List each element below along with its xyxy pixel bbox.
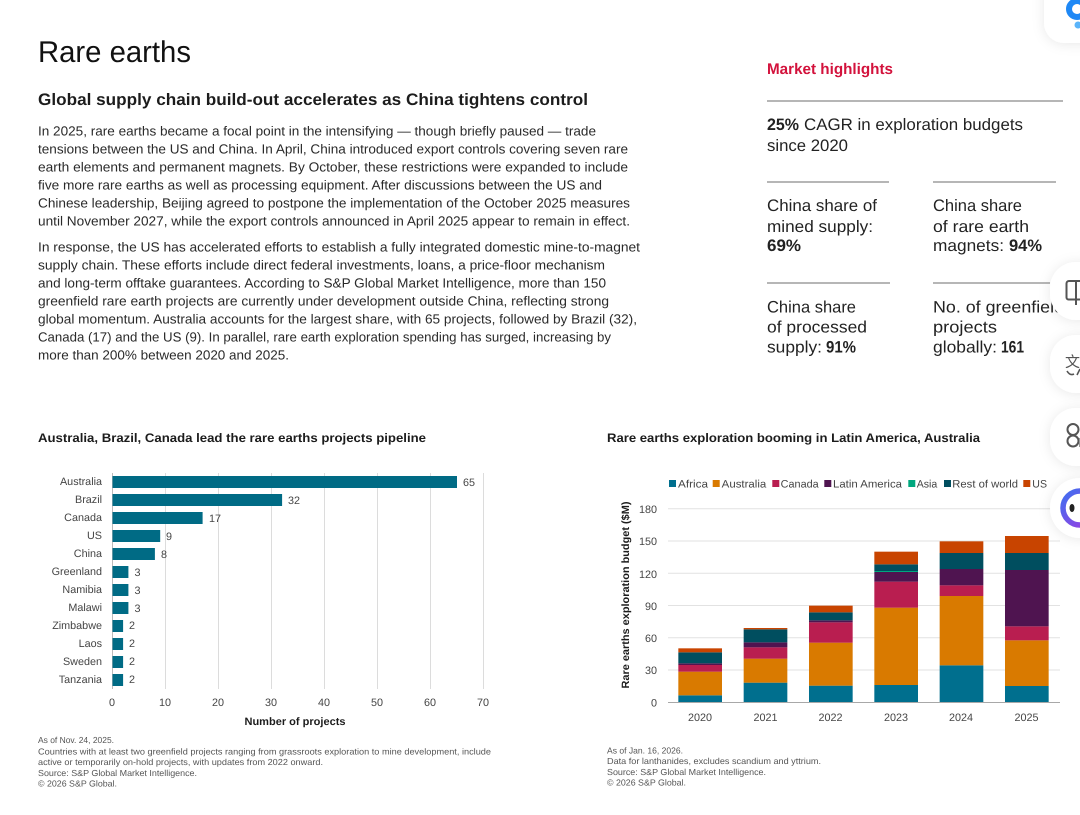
footnote: right chart: Source: S&P Global Market Intelligence. [607, 767, 766, 777]
chart title: projects pipeline: Australia, Brazil, Canada lead the rare earths projects pipeline [38, 431, 426, 445]
stacked bar chart: exploration budgets: 2020 [688, 712, 712, 724]
stat: mined supply: mined supply: [767, 217, 873, 236]
bar chart: projects by country: 3 [134, 567, 141, 579]
text block: response paragraph: global momentum. Australia accounts for the largest share, with 65 projects, followed by Brazil (32), [38, 312, 637, 326]
stat: CAGR: 25% [767, 115, 799, 134]
bar chart: projects by country: Zimbabwe [52, 620, 102, 632]
stacked bar chart: exploration budgets: 2021 [753, 712, 778, 724]
stat: greenfield projects [933, 298, 1064, 356]
bar chart: projects by country: Malawi [68, 602, 102, 614]
text block: response paragraph: Canada (17) and the US (9). In parallel, rare earth exploration spending has surged, increasing by [38, 330, 611, 344]
floating button: translate [1050, 335, 1080, 393]
text block: response paragraph: In response, the US has accelerated efforts to establish a fully integrated domestic mine-to-magnet [38, 240, 640, 254]
stat: processed supply: 91% [826, 338, 856, 356]
footnote: left chart: As of Nov. 24, 2025. [38, 735, 114, 745]
stacked bar chart: exploration budgets: 180 [639, 504, 657, 516]
footnote: left chart: Countries with at least two greenfield projects ranging from grassroots exploration to mine development, include [38, 746, 491, 756]
axis title: exploration budget: Rare earths exploration budget ($M) [620, 502, 632, 688]
stat: greenfield projects: No. of greenfield [933, 298, 1064, 316]
stat: greenfield projects: 161 [1001, 338, 1024, 356]
footnote: left chart [38, 735, 491, 788]
stacked bar chart: exploration budgets: 150 [639, 536, 657, 548]
stacked bar chart: exploration budgets: 2024 [949, 712, 973, 724]
bar chart: projects by country: 20 [212, 697, 224, 709]
footnote: right chart: © 2026 S&P Global. [607, 778, 686, 788]
stat: rare earth magnets: magnets: [933, 236, 1004, 255]
bar chart: projects by country: Canada [64, 512, 102, 524]
bar chart: projects by country: 2 [129, 620, 135, 632]
bar chart: projects by country: Brazil [75, 494, 102, 506]
stacked bar chart: exploration budgets [620, 502, 1060, 724]
bar chart: projects by country: 17 [209, 513, 221, 525]
stacked bar chart: exploration budgets: 60 [645, 633, 657, 645]
bar chart: projects by country: Tanzania [59, 674, 102, 686]
stacked bar chart: exploration budgets: 120 [639, 569, 657, 581]
floating button: apps [1050, 408, 1080, 466]
stat: mined supply: 69% [767, 236, 801, 255]
floating button: translate: 文 [1065, 351, 1080, 372]
bar chart: projects by country: Laos [79, 638, 103, 650]
legend: regions: Africa [678, 478, 708, 490]
bar chart: projects by country: 70 [477, 697, 489, 709]
bar chart: projects by country: 2 [129, 638, 135, 650]
text block: intro paragraph: In 2025, rare earths became a focal point in the intensifying — though briefly paused — trade [38, 124, 596, 138]
stacked bar chart: exploration budgets: 90 [645, 601, 657, 613]
title: Rare earths [38, 36, 191, 69]
bar chart: projects by country: 40 [318, 697, 330, 709]
bar chart: projects by country: 9 [166, 531, 172, 543]
text block: intro paragraph: until November 2027, while the export controls announced in April 2025 appear to remain in effect. [38, 214, 630, 228]
footnote: left chart: Source: S&P Global Market Intelligence. [38, 768, 197, 778]
stacked bar chart: exploration budgets: 2023 [884, 712, 908, 724]
axis title: number of projects: Number of projects [244, 716, 346, 728]
legend: regions [669, 478, 1047, 490]
bar chart: projects by country: 0 [109, 697, 115, 709]
stat: CAGR: since 2020 [767, 136, 848, 155]
footnote: right chart [607, 746, 821, 788]
bar chart: projects by country: 60 [424, 697, 436, 709]
bar chart: projects by country: Australia [60, 476, 102, 488]
legend: regions: Asia [917, 478, 937, 490]
bar chart: projects by country: 3 [134, 603, 141, 615]
footnote: left chart: © 2026 S&P Global. [38, 778, 117, 788]
subheading: Global supply chain build-out accelerates as China tightens control [38, 90, 588, 109]
bar chart: projects by country: 30 [265, 697, 277, 709]
panel: market highlights [767, 61, 1064, 356]
bar chart: projects by country: Sweden [63, 656, 102, 668]
stat: greenfield projects: projects [933, 318, 997, 336]
text block: intro paragraph: Chinese leadership, Beijing agreed to postpone the implementation of the October 2025 measures [38, 196, 630, 210]
stat: CAGR: CAGR in exploration budgets [804, 115, 1023, 134]
stat: CAGR [767, 115, 1023, 155]
legend: regions: Latin America [833, 478, 902, 490]
chart title: exploration: Rare earths exploration booming in Latin America, Australia [607, 431, 980, 445]
stat: processed supply: supply: [767, 338, 822, 356]
stat: mined supply: China share of [767, 196, 877, 215]
text block: response paragraph: and long-term offtake guarantees. According to S&P Global Market Intelligence, more than 150 [38, 276, 606, 290]
stacked bars [678, 536, 1049, 702]
bar chart: projects by country: 50 [371, 697, 383, 709]
text block: intro paragraph: tensions between the US and China. In April, China introduced export controls covering seven rare [38, 142, 628, 156]
bar chart: projects by country [52, 473, 489, 728]
text block: intro paragraph: five more rare earths as well as processing equipment. After discussions between the US and [38, 178, 602, 192]
footnote: left chart: active or temporarily on-hold projects, with updates from 2022 onward. [38, 757, 323, 767]
bar chart: projects by country: 65 [463, 477, 475, 489]
footnote: right chart: Data for lanthanides, excludes scandium and yttrium. [607, 756, 821, 766]
stacked bar chart: exploration budgets: 30 [645, 665, 657, 677]
text block: response paragraph: supply chain. These efforts include direct federal investments, loans, a price-floor mechanism [38, 258, 605, 272]
bar chart: projects by country: 10 [159, 697, 171, 709]
footnote: right chart: As of Jan. 16, 2026. [607, 746, 683, 756]
text block: response paragraph: greenfield rare earth projects are currently under development outside China, reflecting strong [38, 294, 609, 308]
stat: rare earth magnets: of rare earth [933, 217, 1029, 236]
legend: regions: Canada [781, 478, 819, 490]
stacked bar chart: exploration budgets: 0 [651, 698, 657, 710]
stat: rare earth magnets: China share [933, 196, 1022, 215]
text block: response paragraph [38, 240, 640, 362]
bar chart: projects by country: Greenland [52, 566, 102, 578]
stat: processed supply: of processed [767, 318, 867, 336]
stat: rare earth magnets: 94% [1009, 236, 1042, 255]
stat: processed supply: China share [767, 298, 856, 316]
stat: greenfield projects: globally: [933, 338, 997, 356]
stat: mined supply [767, 196, 877, 255]
bar chart: projects by country: 32 [288, 495, 300, 507]
text block: intro paragraph [38, 124, 630, 228]
bar chart: projects by country: 2 [129, 674, 135, 686]
text block: response paragraph: more than 200% between 2020 and 2025. [38, 348, 289, 362]
floating button: AI ring [1050, 478, 1080, 538]
legend: regions: US [1032, 478, 1047, 490]
bar chart: projects by country: China [74, 548, 102, 560]
bar chart: projects by country: Namibia [62, 584, 102, 596]
bar chart: projects by country: US [87, 530, 102, 542]
floating button: book [1050, 262, 1080, 320]
heading: market highlights: Market highlights [767, 61, 893, 78]
bar chart: projects by country: 8 [161, 549, 167, 561]
bar chart: projects by country: 2 [129, 656, 135, 668]
text block: intro paragraph: earth elements and permanent magnets. By October, these restrictions were expanded to include [38, 160, 628, 174]
legend: regions: Australia [722, 478, 766, 490]
floating button: assistant [1044, 0, 1080, 43]
bar chart: projects by country: 3 [134, 585, 141, 597]
stat: processed supply [767, 298, 867, 356]
legend: regions: Rest of world [952, 478, 1018, 490]
stacked bar chart: exploration budgets: 2022 [818, 712, 843, 724]
stat: rare earth magnets [933, 196, 1042, 255]
stacked bar chart: exploration budgets: 2025 [1014, 712, 1039, 724]
